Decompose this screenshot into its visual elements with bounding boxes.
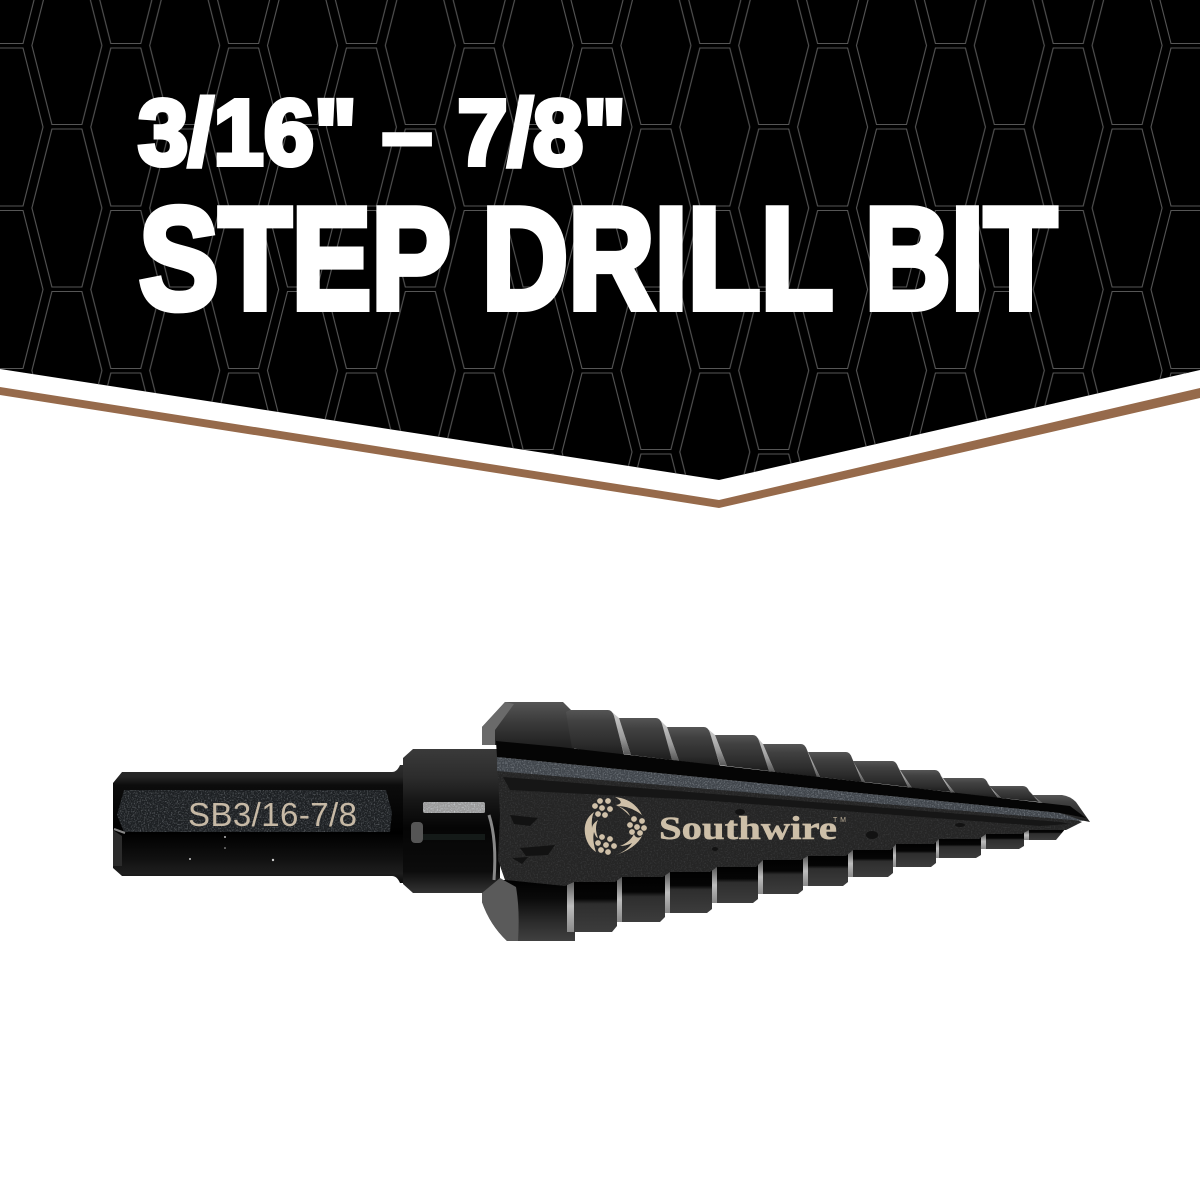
shank marking: SB3/16-7/8 <box>188 796 357 833</box>
icon: Southwire logo <box>585 797 647 855</box>
drill bit shank <box>113 765 408 883</box>
flute highlight band <box>497 757 1084 821</box>
drill bit flange <box>482 702 575 941</box>
drill bit collar <box>403 749 500 893</box>
copper chevron stripe <box>0 387 1200 508</box>
flute groove <box>496 741 1086 818</box>
header banner with hexagon pattern <box>0 0 1200 480</box>
surface wear marks <box>510 809 965 864</box>
brand name: Southwire <box>659 811 837 847</box>
stepped cone: lower steps <box>567 828 1066 932</box>
stepped cone: upper steps <box>566 710 1090 822</box>
product photo: step drill bit <box>113 702 1090 941</box>
title: size range: 3/16" – 7/8" <box>138 80 626 184</box>
trademark: TM <box>833 817 846 824</box>
flute face <box>496 741 1086 886</box>
